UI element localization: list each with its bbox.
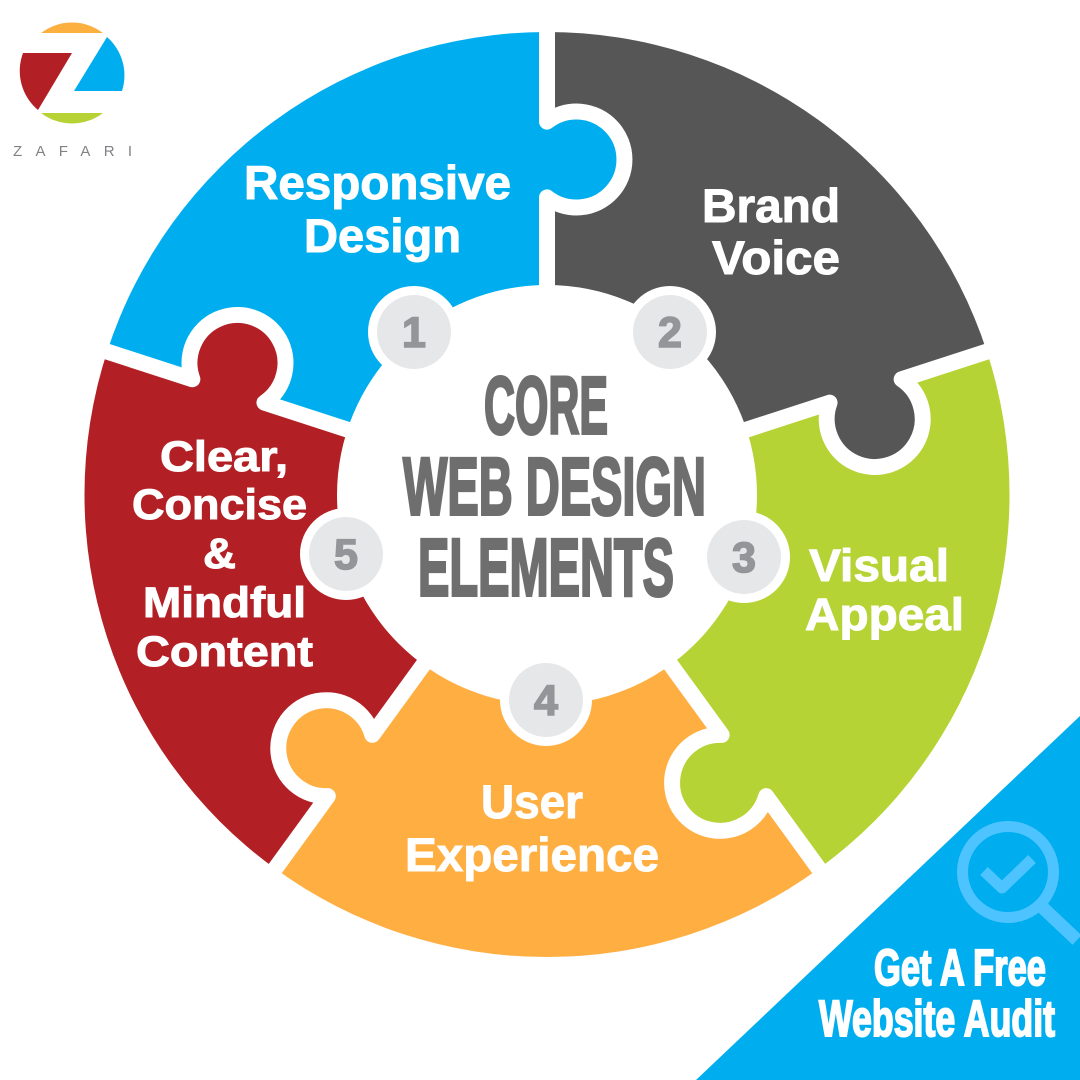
label: user experience: User	[481, 775, 583, 828]
label: clear concise mindful content: Content	[136, 628, 313, 676]
title	[403, 360, 706, 614]
number badge 1: 1	[402, 309, 426, 357]
label: responsive design	[244, 156, 511, 262]
call to action corner	[696, 716, 1080, 1080]
number badge 3: 3	[732, 534, 756, 582]
label: user experience	[405, 775, 659, 881]
label: brand voice: Brand	[702, 179, 840, 232]
number badge 4	[509, 663, 583, 737]
title: WEB DESIGN	[403, 442, 706, 532]
label: visual appeal: Visual	[809, 540, 949, 591]
label: clear concise mindful content: Clear,	[160, 433, 288, 481]
number badge 3	[707, 520, 781, 594]
icon: magnifier with check	[962, 826, 1077, 940]
label: brand voice	[702, 179, 840, 284]
piece: clear concise content	[0, 278, 571, 913]
label: visual appeal	[805, 540, 964, 640]
piece: responsive design	[107, 32, 624, 494]
number badge 2	[633, 295, 707, 369]
number badge 2: 2	[658, 309, 682, 357]
title: CORE	[484, 360, 608, 452]
piece: brand voice	[411, 0, 1011, 568]
label: responsive design: Responsive	[244, 156, 511, 209]
centre hub	[300, 285, 790, 746]
logo mark	[20, 22, 124, 124]
piece: visual appeal	[484, 236, 1080, 914]
logo wordmark: ZAFARI	[13, 143, 132, 160]
number badge 4: 4	[534, 677, 558, 725]
logo: zafari	[13, 22, 132, 160]
label: visual appeal: Appeal	[805, 589, 964, 640]
label: clear concise mindful content	[132, 433, 313, 676]
label: responsive design: Design	[304, 209, 461, 262]
piece: user experience	[212, 449, 903, 1080]
label: brand voice: Voice	[712, 231, 840, 284]
title: ELEMENTS	[418, 522, 674, 614]
label: clear concise mindful content: Mindful	[143, 579, 306, 627]
label: clear concise mindful content: Concise	[132, 481, 307, 529]
label: user experience: Experience	[405, 828, 659, 881]
number badge 5	[309, 517, 383, 591]
cta text	[819, 939, 1055, 1047]
number badge 1	[377, 295, 451, 369]
label: clear concise mindful content: &	[203, 530, 236, 578]
number badge 5: 5	[334, 531, 358, 579]
